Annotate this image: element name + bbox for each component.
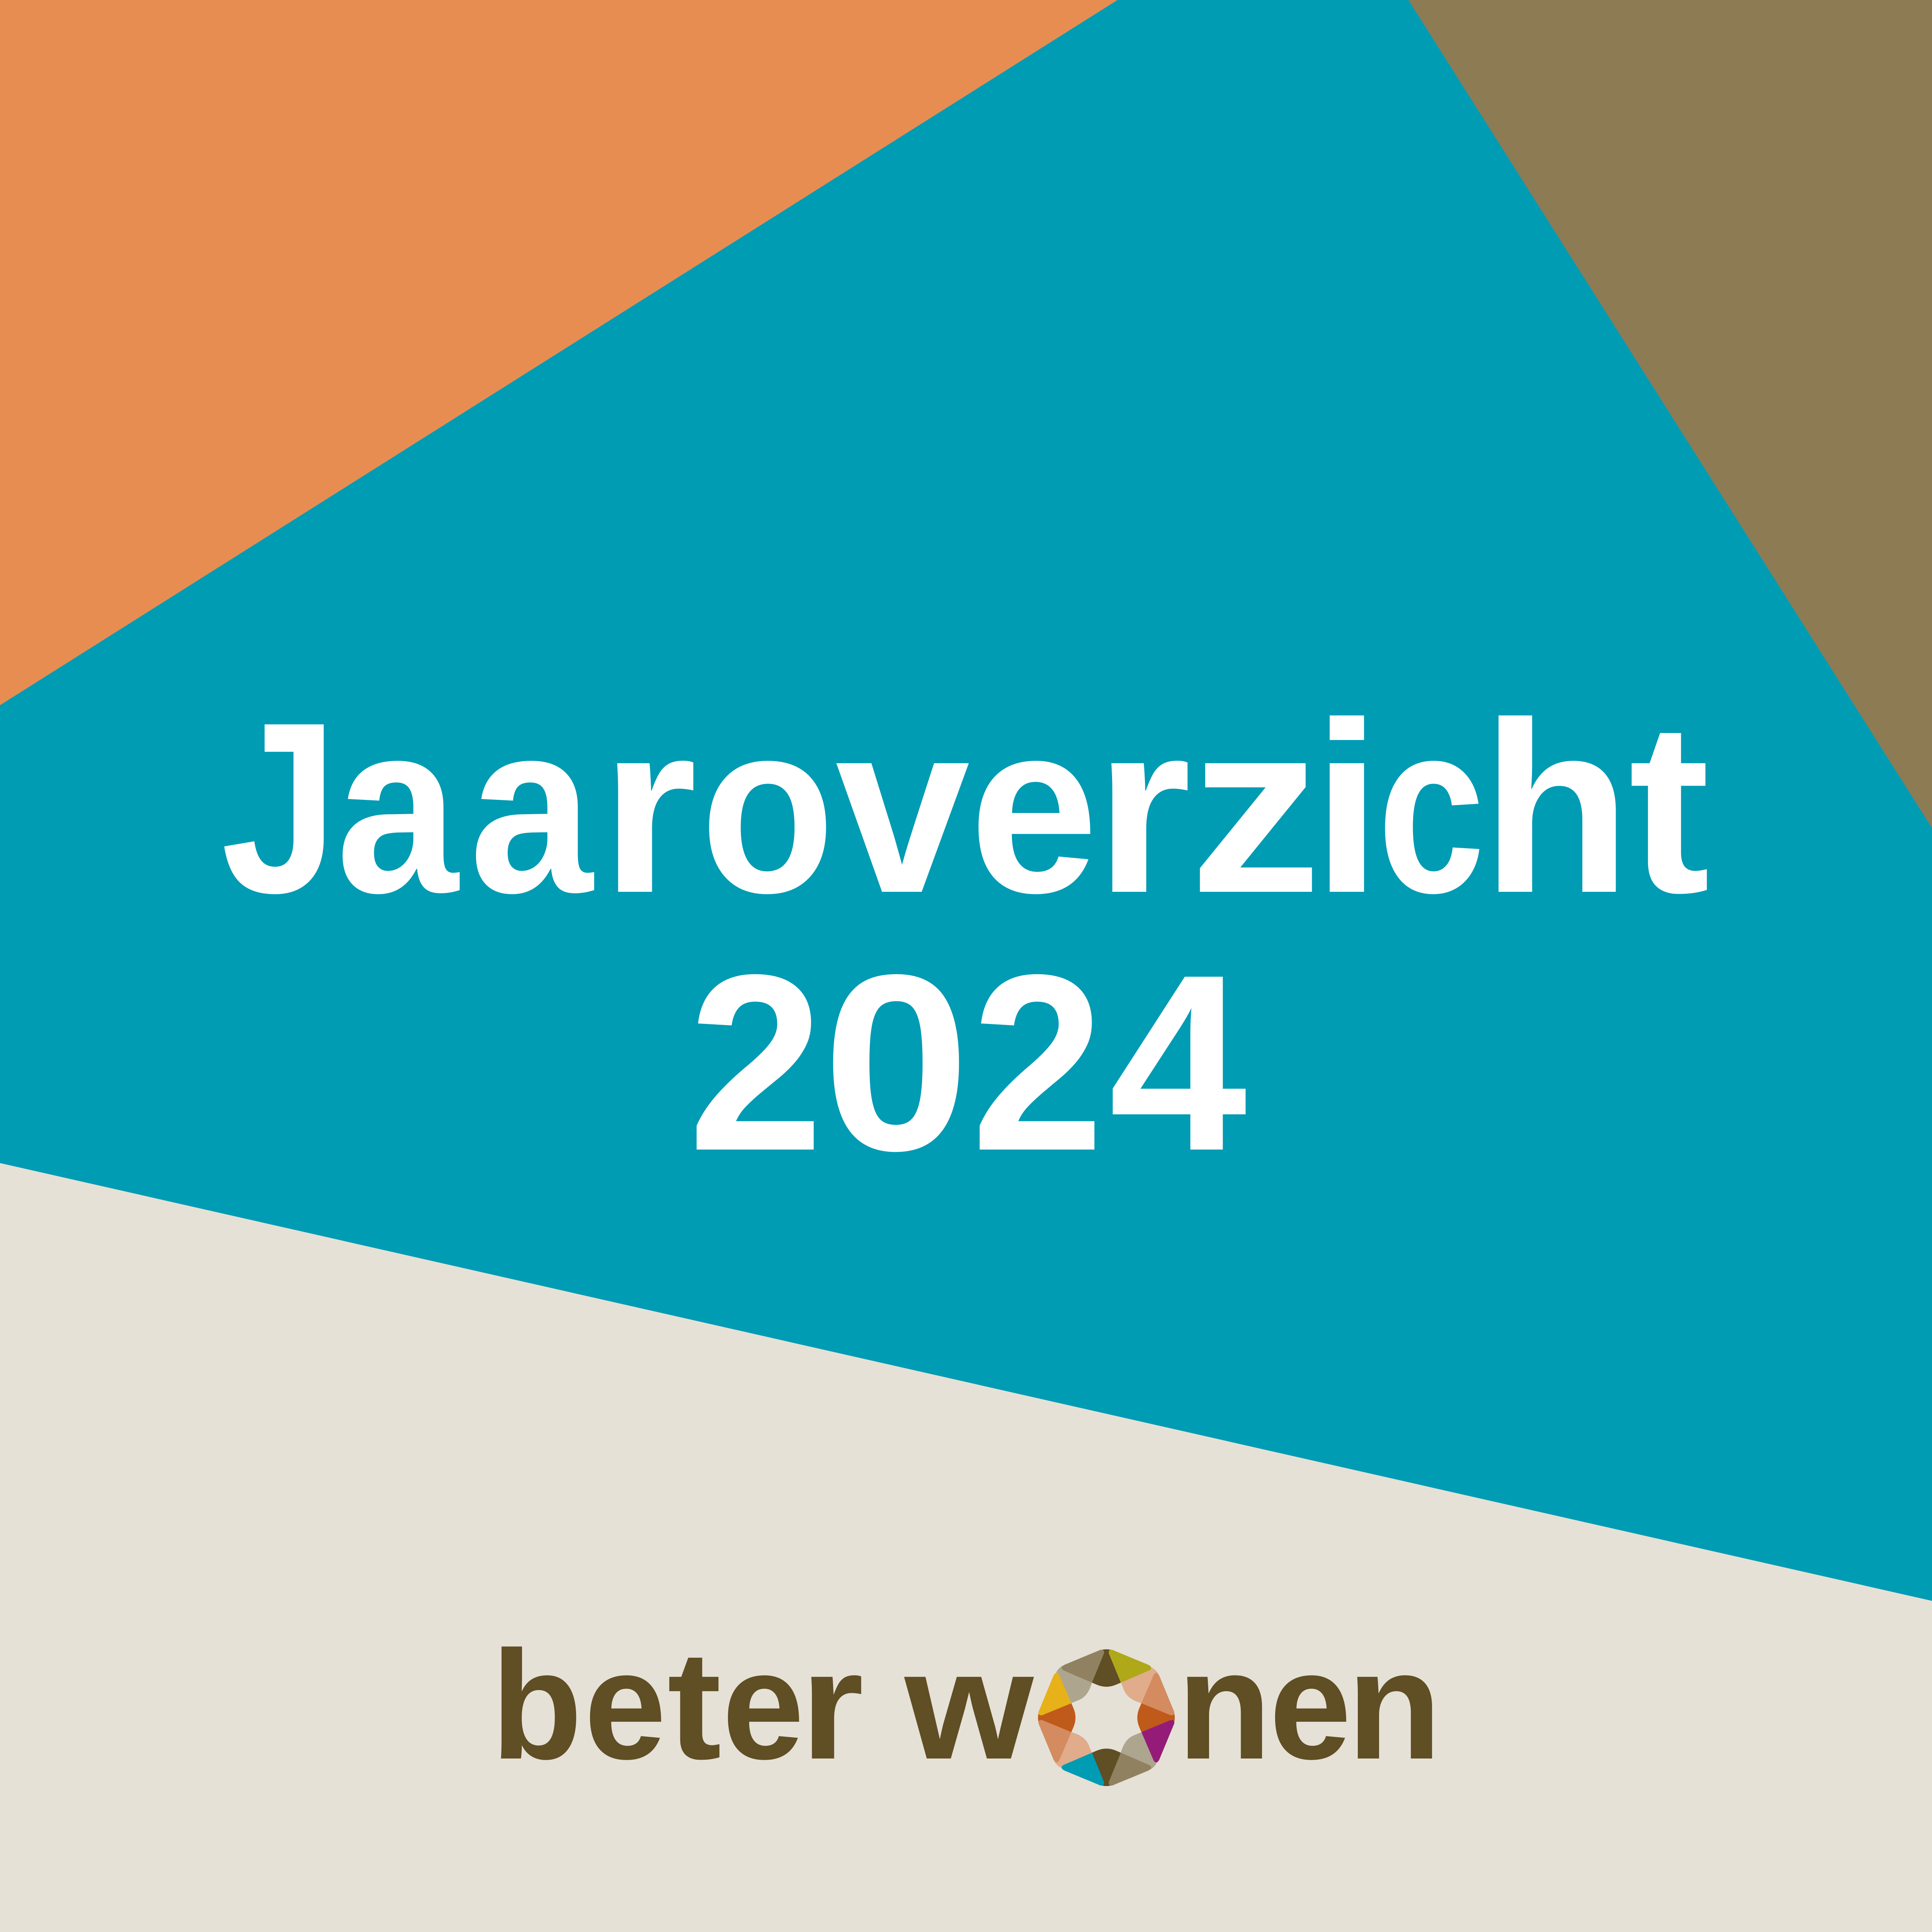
title line 1: o	[701, 672, 835, 944]
logo wordmark: beter w: e	[722, 1619, 804, 1791]
title line 1: e	[969, 672, 1098, 944]
logo: beter wonen	[491, 1619, 1442, 1791]
title line 1: v	[835, 672, 971, 944]
panel: cream footer	[0, 1163, 1932, 1932]
triangle pieces, coloured set	[1039, 1650, 1174, 1786]
title line 1: J	[221, 672, 338, 944]
title line 2: 2	[688, 922, 823, 1203]
title line 1: r	[601, 672, 697, 944]
title	[221, 672, 1710, 1203]
panel: brown corner triangle	[1408, 0, 1932, 828]
title line 1: i	[1312, 672, 1382, 944]
logo wordmark: beter w: e	[584, 1619, 666, 1791]
title line 2: 4	[1109, 922, 1248, 1203]
logo wordmark: beter w: b	[491, 1619, 582, 1791]
title line 1: t	[1629, 672, 1710, 944]
icon: octagon logo mark	[1038, 1649, 1175, 1786]
title line 1: h	[1481, 672, 1631, 944]
dark cross pieces	[1038, 1649, 1175, 1786]
title line 1: a	[469, 672, 594, 944]
light corner pieces	[1055, 1666, 1158, 1769]
title line 2: 0	[823, 922, 970, 1203]
logo wordmark: nen: n	[1347, 1619, 1442, 1791]
logo wordmark: beter w: r	[801, 1619, 864, 1791]
triangle pieces, first set	[1039, 1650, 1174, 1786]
panel: orange corner triangle	[0, 0, 1117, 705]
title line 1: a	[336, 672, 460, 944]
title line 1: z	[1189, 672, 1321, 944]
logo wordmark: beter w: w	[902, 1619, 1034, 1791]
title line 1: c	[1378, 672, 1485, 944]
title line 1: r	[1095, 672, 1191, 944]
logo wordmark: nen: n	[1177, 1619, 1272, 1791]
title line 2: 2	[971, 922, 1104, 1203]
logo wordmark: beter w: t	[667, 1619, 721, 1791]
logo wordmark: nen: e	[1269, 1619, 1351, 1791]
